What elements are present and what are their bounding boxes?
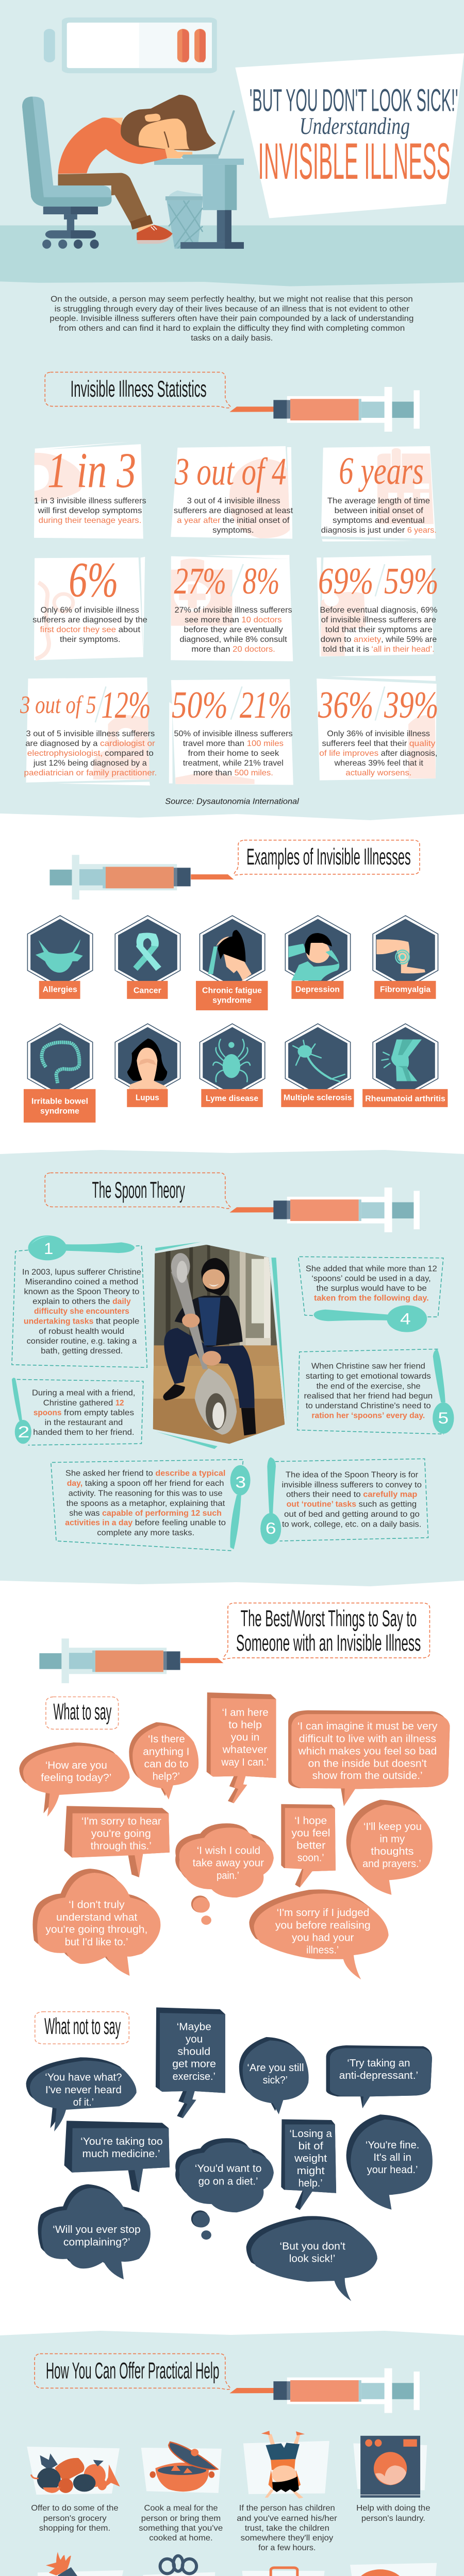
bubble: you're fine [346,2114,433,2210]
step 2 [12,1378,143,1445]
bubble: you're taking too much medicine: much medicine.’ [82,2148,160,2160]
step 6: such as getting [359,1499,417,1509]
tip text: somewhere they'll enjoy [241,2533,334,2543]
stat text: 500 miles. [235,768,273,777]
step 2: in the restaurant and [45,1418,123,1427]
bubble: I'm sorry if I judged: illness.’ [306,1944,339,1956]
icon: lyme disease [200,1024,265,1107]
stat text: a year after [177,516,221,525]
bubble: are you still sick: sick?’ [263,2074,288,2086]
bubble: you're taking too much medicine [64,2121,170,2192]
bubble: maybe you should: get more [172,2058,216,2070]
step 1 [12,1235,147,1367]
stat text: sufferers are diagnosed by the [32,615,147,624]
bubble: is there anything: help?’ [153,1770,180,1782]
stat text: 3 out of 5 invisible illness sufferers [26,729,155,738]
stat text [175,605,292,654]
source note: Source: Dysautonomia International [165,796,300,806]
hero floor [0,225,464,286]
step 1: Miserandino coined a method [25,1277,138,1286]
icon: cancer [115,916,180,999]
tip text: Cook a meal for the [144,2503,218,2513]
bubble: I'll keep you: ‘I'll keep you [363,1821,422,1832]
panel: the spoon theory [12,1173,454,1449]
bubble: I'm sorry to hear: through this.’ [91,1840,152,1852]
bubble: you have what: I've never heard [45,2084,122,2095]
bubble: I'll keep you: and prayers.’ [362,1858,421,1869]
step 1: difficulty she encounters [34,1307,129,1316]
stat text [24,729,157,777]
icon: fibromyalgia: Fibromyalgia [380,985,431,994]
icon: syringe [49,855,234,900]
bubble: I'm sorry to hear [64,1806,170,1877]
bubble: is there anything: ‘Is there [148,1733,185,1745]
bubble: I don't truly understand: but I'd like to.’ [65,1936,128,1948]
bubble: I am here to help: ‘I am here [222,1706,269,1718]
icon: feather duster [46,2552,102,2576]
icon: depression: Depression [295,985,340,994]
stat text: quality [409,739,436,748]
subheading: what to say [46,1697,119,1729]
icon: allergies [27,916,93,999]
bubble: you have what: of it.’ [73,2096,94,2108]
icon: gift box [151,2556,205,2576]
stat text: told that it is [323,645,369,654]
bubble: I'll keep you: thoughts [371,1845,413,1857]
stat text: 20 doctors. [233,645,275,654]
stat text [319,729,437,777]
bubble: you'd want to go on a diet: go on a diet.’ [198,2175,258,2187]
bubble: I wish I could: take away your [193,1857,264,1869]
step 6: 6 [266,1519,276,1537]
stat numbers [20,684,151,726]
bubble: losing a bit of weight: bit of [299,2140,323,2151]
icon: syringe [229,387,420,432]
stat text [34,496,146,525]
bubble: I'm sorry if I judged: you had your [292,1932,354,1943]
tip text: something that you've [139,2523,223,2533]
step 1: consider routine, e.g. taking a [27,1336,137,1346]
tip text: If the person has children [239,2503,335,2513]
panel: invisible illness statistics: 21% [240,684,291,726]
bubble: will you ever stop complaining: ‘Will you ever stop [53,2224,141,2235]
stat text: cardiologist or [100,739,155,748]
stat card: 3 out of 4 [171,446,293,539]
stat text: 10 doctors [241,615,281,624]
bubble: try taking an anti-depressant: anti-depressant.’ [339,2070,418,2081]
tip: cook a meal [139,2442,223,2543]
stat card: 36% / 39% [317,676,439,781]
bubble: I'm sorry to hear: you're going [91,1828,151,1839]
stat text: about [119,625,140,634]
heading: examples [234,840,420,875]
bubble: try taking an anti-depressant: ‘Try taking an [347,2057,410,2069]
stat text [32,605,147,644]
tip text: person's grocery [43,2514,107,2523]
tip: groceries [27,2447,120,2533]
stat text: actually worsens. [345,768,411,777]
tip text: cooked at home. [149,2533,213,2543]
bubble: I'll keep you: in my [379,1833,405,1845]
icon: chronic fatigue syndrome: syndrome [212,996,252,1005]
heading: spoon theory [45,1173,230,1209]
stat text: symptoms. [212,526,254,535]
bubble: maybe you should: ‘Maybe [177,2021,211,2032]
intro text [49,294,413,343]
stat card: 1 in 3 [34,442,146,539]
step 6: out ‘routine’ tasks [287,1499,356,1509]
bubble: you're fine: ‘You're fine. [366,2139,419,2150]
panel: invisible illness statistics: 12% [101,684,151,726]
stat text: see more than [185,615,239,624]
stat text: first doctor they see [40,625,116,634]
bubble: maybe you should: should [177,2046,210,2057]
step 1: In 2003, lupus sufferer Christine [22,1267,141,1277]
tip: clean the house [28,2552,123,2576]
step 1: of robust health would [39,1327,124,1336]
step 3: the spoons as a metaphor, explaining that [67,1499,225,1508]
bubble: how are you feeling: feeling today?’ [41,1772,111,1784]
bubble: I am here to help: you in [231,1732,259,1743]
bubble: I don't truly understand: ‘I don't truly [69,1899,125,1910]
bubble: but you don't look sick [246,2216,377,2301]
panel: examples of invisible illnesses [24,840,448,1123]
tip text: Offer to do some of the [31,2503,119,2513]
stat text: 3 out of 4 invisible illness [187,496,280,505]
stat text: down to [321,635,351,644]
bubble: how are you feeling: ‘How are you [45,1759,107,1771]
icon: lupus [115,1024,180,1107]
step 1: daily [112,1297,131,1306]
bubble: losing a bit of weight: weight [294,2153,327,2164]
icon: low battery [44,18,217,73]
tip: simply ask [345,2563,442,2576]
stat text: diagnosis is just under [321,526,405,535]
icon: irritable bowel syndrome: syndrome [40,1107,79,1115]
icon: multiple sclerosis [281,1024,354,1107]
panel: how you can offer practical help [27,2354,442,2576]
panel: best and worst things to say [39,1603,429,1729]
step 5 [297,1349,454,1434]
bubble: is there anything [129,1722,198,1800]
bubble: will you ever stop complaining [38,2184,151,2279]
bubble: you have what: ‘You have what? [45,2072,122,2083]
icon: multiple sclerosis: Multiple sclerosis [284,1093,352,1102]
stat card: 3 out of 5 / 12% [20,677,157,786]
tip text: for a few hours. [258,2543,316,2552]
step 3: activity. The reasoning for this was to use [69,1488,223,1498]
bubble: is there anything: anything I [143,1745,189,1757]
stat numbers: 50% [172,684,228,726]
bubble: I hope you feel better: ‘I hope [294,1815,327,1826]
step 2: spoons [34,1408,61,1417]
stat text: of life improves [319,749,378,758]
bubble: you're fine: It's all in [373,2151,411,2163]
tip text [31,2503,119,2533]
subheading: what not to say [35,2012,129,2044]
stat text: electrophysiologist, [27,749,103,758]
bubble: I wish I could [175,1823,274,1925]
stat card: 1 in 3: 1 in 3 [47,443,136,498]
icon: allergies: Allergies [43,985,77,994]
step 1: known as the Spoon Theory to [24,1287,139,1296]
bubble: you'd want to go on a diet: ‘You'd want to [195,2162,261,2174]
bubble: I'm sorry if I judged: ‘I'm sorry if I judged [277,1907,369,1919]
bubble: I hope you feel better: better [296,1840,325,1851]
heading: best/worst things [223,1603,429,1659]
group: what to say speech bubbles [19,1692,450,1979]
step 1: bath, getting dressed. [41,1346,123,1355]
stat text: sufferers are diagnosed at least [174,506,293,515]
stat text: sufferers feel that their [322,739,407,748]
photo: Christine Miserandino holding a giant spoon [148,1242,290,1449]
title [250,83,458,190]
step 3: capable of performing 12 such [102,1509,222,1518]
bubble: how are you feeling [19,1742,129,1817]
bubble: I wish I could: ‘I wish I could [197,1845,260,1856]
bubble: is there anything: can do to [144,1758,189,1770]
stat numbers: 69% [318,561,373,602]
panel: hero [0,18,464,286]
stat text: the initial onset of [223,516,289,525]
icon: fibromyalgia [373,916,438,999]
icon: first aid kit [255,2568,313,2576]
step 3 [51,1460,251,1551]
stat text: from their home to seek [188,749,279,758]
bubble: I'm sorry if I judged: you before realising [275,1920,371,1931]
icon: groceries [31,2453,120,2493]
bubble: I hope you feel better: soon.’ [297,1852,324,1863]
stat text: their symptoms. [60,635,121,644]
icon: chronic fatigue syndrome [196,916,268,1010]
step 1: that people [96,1316,139,1326]
icon: depression [285,916,351,999]
step 1: undertaking tasks [24,1316,93,1326]
bubble: I am here to help: to help [228,1719,262,1731]
stat text: 27% of invisible illness sufferers [175,605,292,615]
panel: invisible illness statistics: 3 out of 4 [174,450,287,493]
intro text: tasks on a daily basis. [191,333,273,343]
bubble: I'm sorry if I judged [249,1889,389,1979]
icon: lyme disease: Lyme disease [206,1094,258,1103]
icon: chronic fatigue syndrome: Chronic fatigue [202,986,262,995]
stat text: 50% of invisible illness sufferers [174,729,293,738]
illustration: exhausted person at desk [22,95,244,249]
bubble: but you don't look sick: look sick!’ [289,2252,335,2264]
stat text: 100 miles [247,739,284,748]
tip text: and you've earned his/her [237,2514,337,2523]
bubble: I'm sorry to hear: ‘I'm sorry to hear [81,1815,161,1827]
bubble: losing a bit of weight: might [297,2165,325,2176]
bubble: you have what [26,2057,137,2131]
step 2: 2 [18,1423,29,1441]
stat text: during their teenage years. [39,516,141,525]
bubble: maybe you should: you [186,2033,203,2045]
group: what not to say speech bubbles [26,2007,433,2301]
step 3: taking a spoon off her friend for each [85,1479,224,1488]
stat numbers: 36% [318,684,373,726]
bubble: I am here to help: way I can.’ [221,1756,269,1768]
tip: bring to hospital [242,2568,325,2576]
bubble: try taking an anti-depressant [326,2045,432,2108]
steps 3 and 6 [51,1458,428,1551]
bubble: you'd want to go on a diet [175,2138,274,2240]
icon: syringe [39,1638,223,1683]
step 4 [299,1257,443,1332]
stat text: travel more than [183,739,244,748]
tip text: trust, take the children [245,2523,329,2533]
bubble: I hope you feel better [281,1804,336,1888]
step 2: handed them to her friend. [33,1428,135,1437]
stat text [174,729,293,777]
tip text: shopping for them. [39,2523,110,2533]
bubble: you're taking too much medicine: ‘You're taking too [80,2136,163,2147]
stat text [174,496,293,535]
stat text: 1 in 3 invisible illness sufferers [34,496,146,505]
tip text [139,2503,223,2543]
step 1: explain to others the [32,1297,110,1306]
step 6: carefully map [363,1490,417,1499]
heading: practical help [35,2354,230,2389]
stat text: will first develop symptoms [38,506,142,515]
stat text: anxiety [354,635,382,644]
stat text: paediatrician or family practitioner. [24,768,157,777]
stat text: more than [191,645,230,654]
bubble: you're fine: your head.’ [367,2164,418,2176]
icon: lupus: Lupus [136,1093,159,1102]
tip text: person's laundry. [361,2514,425,2523]
stat card: 27% / 8%: 8% [243,561,279,602]
stat text: compared to [105,749,154,758]
panel: best and worst things to say: What to say [53,1699,111,1724]
stat card: 27% / 8% [171,555,293,662]
step 3: activities in a day [65,1518,132,1527]
step 2: 12 [115,1398,124,1408]
step 3: describe a typical [155,1468,225,1478]
step 2: from empty tables [64,1408,134,1417]
bubble: I am here to help: whatever [222,1744,267,1755]
bubble: I hope you feel better: you feel [291,1827,330,1839]
stat card: 6%: 6% [69,552,119,607]
step 5: 5 [438,1409,449,1427]
group: what not to say speech bubbles: What not to say [44,2013,121,2039]
step 6: others their need to [286,1490,361,1499]
step 4: 4 [400,1310,411,1328]
stat text: treatment, while 21% travel [183,758,284,768]
icon: speech bubbles [355,2569,431,2576]
stat text [321,496,437,535]
icon: irritable bowel syndrome [24,1024,95,1123]
step 3: She asked her friend to [65,1468,153,1478]
step 6 [260,1458,428,1544]
stat text [320,605,437,654]
stat text: are diagnosed by a [25,739,97,748]
stat numbers: 27% [174,561,226,602]
stat text: 6 years. [407,526,437,535]
bubble: losing a bit of weight: help.’ [299,2177,323,2189]
step 3: day, [67,1479,82,1488]
bubble: I am here to help [207,1692,276,1803]
bubble: losing a bit of weight: ‘Losing a [289,2128,332,2139]
bubble: I can imagine [288,1710,450,1806]
bubble: I don't truly understand: understand what [56,1911,138,1923]
stat card: 6 years [321,446,437,541]
icon: irritable bowel syndrome: Irritable bowel [31,1096,88,1106]
bubble: I don't truly understand [32,1869,160,1976]
bubble: are you still sick [239,2037,309,2114]
step 2: During a meal with a friend, [32,1388,135,1397]
heading: statistics [45,372,230,408]
step 3: 3 [235,1473,246,1491]
icon: pot [150,2442,218,2492]
stat text: more than [193,768,232,777]
stat card: 50% / 21% [169,679,293,785]
step 2: Christine gathered [43,1398,113,1408]
tip: buy a present [141,2556,221,2576]
icon: rheumatoid arthritis [362,1024,448,1107]
panel: invisible illness statistics [20,372,439,806]
icon: syringe [229,1188,420,1232]
stat card: 6% [32,552,147,660]
tip text: person or bring them [141,2514,221,2523]
bubble: will you ever stop complaining: complaining?’ [63,2236,130,2248]
bubble: maybe you should [156,2007,225,2118]
step 1: 1 [44,1240,53,1258]
step 3: before feeling unable to [135,1518,226,1527]
stat numbers: 3 out of 5 [20,691,96,719]
title panel [235,54,464,218]
bubble: but you don't look sick: ‘But you don't [279,2240,345,2252]
bubble: maybe you should: exercise.’ [173,2071,216,2082]
icon: syringe [229,2368,420,2413]
tip: take the children [237,2431,337,2552]
icon: child doing handstand [261,2431,305,2499]
stat card: 69% / 59% [317,555,439,656]
bubble: are you still sick: ‘Are you still [247,2062,304,2073]
bubble: I'll keep you [346,1800,433,1895]
tip text [237,2503,337,2552]
stat text: just 12% being diagnosed by a [33,758,147,768]
stat text: Only 6% of invisible illness [41,605,139,615]
stat text: diagnosed, while 8% consult [179,635,287,644]
panel: the spoon theory: The Spoon Theory [92,1177,185,1203]
tip: laundry [353,2436,430,2523]
stat text: before they are eventually [184,625,283,634]
bubble: I don't truly understand: you're going through, [45,1924,147,1935]
bubble: losing a bit of weight [281,2120,336,2210]
bubble: I wish I could: pain.’ [217,1870,239,1882]
step 3: she was [69,1509,100,1518]
tip text [356,2503,430,2523]
step 3: complete any more tasks. [97,1528,194,1537]
icon: cancer: Cancer [134,986,161,995]
icon: washing machine [360,2436,420,2498]
